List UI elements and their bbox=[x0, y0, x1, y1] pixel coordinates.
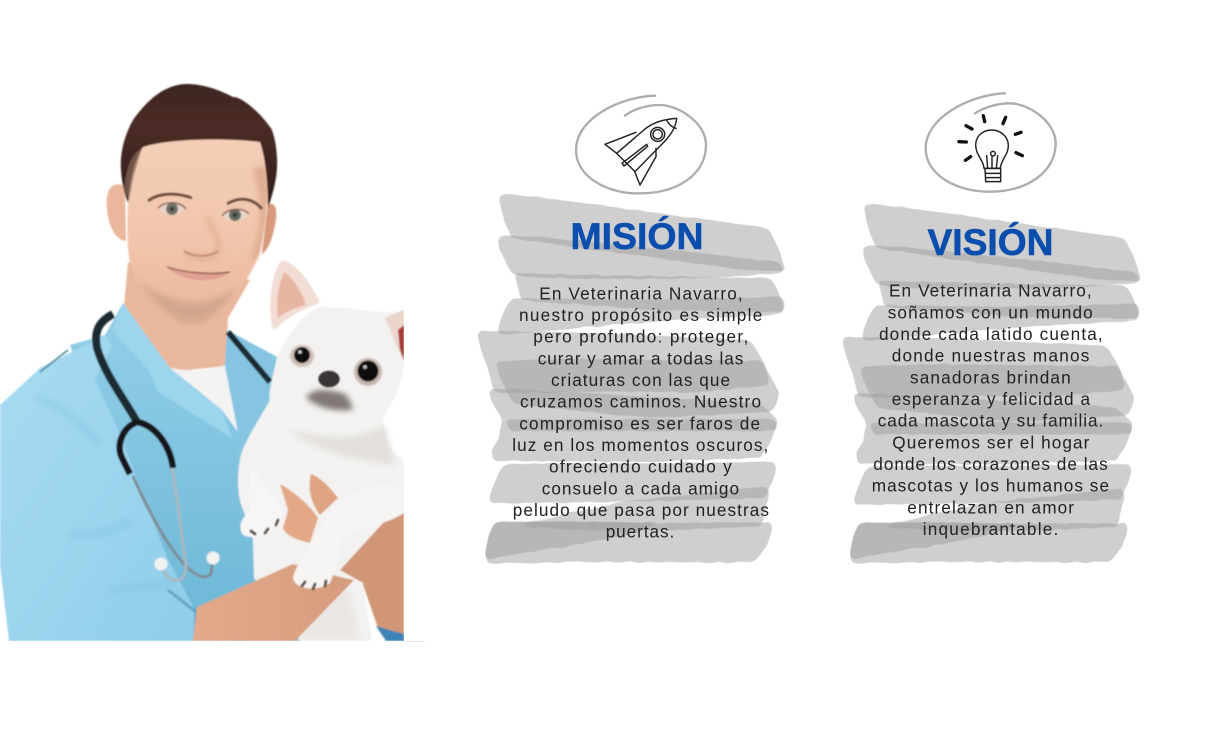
shirt torso bbox=[70, 303, 300, 641]
dog eyes bbox=[290, 345, 314, 367]
ears bbox=[107, 184, 126, 241]
text block: mision: pero profundo: proteger, bbox=[533, 327, 748, 347]
text block: mision: curar y amar a todas las bbox=[538, 348, 743, 368]
face bbox=[126, 138, 269, 280]
photo: veterinarian holding a white chihuahua bbox=[0, 84, 404, 641]
brush strokes: vision heading bbox=[863, 204, 1141, 289]
heading: vision: VISIÓN bbox=[928, 221, 1054, 263]
dog foreleg and paw left bbox=[239, 515, 253, 538]
text block: vision: En Veterinaria Navarro, bbox=[889, 281, 1092, 301]
sleeve bbox=[0, 335, 196, 641]
stethoscope neck tube bbox=[96, 314, 137, 422]
text block: vision: soñamos con un mundo bbox=[888, 302, 1093, 322]
neck bbox=[124, 262, 250, 372]
text block: mision bbox=[512, 283, 769, 542]
text block: vision: sanadoras brindan bbox=[910, 367, 1071, 387]
text block: vision: mascotas y los humanos se bbox=[872, 476, 1109, 496]
white undershirt bbox=[167, 365, 238, 432]
text block: vision: donde cada latido cuenta, bbox=[879, 324, 1103, 344]
dog left ear bbox=[270, 260, 320, 330]
dog foreleg and paw right bbox=[292, 502, 404, 590]
text block: mision: criaturas con las que bbox=[551, 370, 730, 390]
text block: mision: consuelo a cada amigo bbox=[542, 478, 739, 498]
text block: vision bbox=[872, 281, 1109, 539]
text block: mision: ofreciendo cuidado y bbox=[549, 457, 732, 477]
text block: mision: cruzamos caminos. Nuestro bbox=[520, 392, 761, 412]
eyebrows bbox=[148, 194, 192, 201]
icon: light bulb in hand-drawn circle bbox=[926, 93, 1056, 192]
dog right ear bbox=[385, 310, 404, 362]
text block: vision: inquebrantable. bbox=[923, 519, 1058, 539]
collar right bbox=[224, 330, 276, 404]
text block: vision: Queremos ser el hogar bbox=[892, 432, 1090, 452]
fingers bbox=[280, 484, 318, 543]
text block: vision: entrelazan en amor bbox=[907, 497, 1074, 517]
text block: mision: peludo que pasa por nuestras bbox=[513, 500, 769, 520]
collar left bbox=[112, 303, 232, 438]
text block: vision: esperanza y felicidad a bbox=[892, 389, 1090, 409]
hair bbox=[121, 84, 277, 208]
text block: mision: En Veterinaria Navarro, bbox=[539, 283, 743, 303]
text block: mision: luz en los momentos oscuros, bbox=[512, 435, 768, 455]
heading: mision: MISIÓN bbox=[570, 215, 704, 257]
mouth bbox=[167, 267, 230, 280]
stethoscope metal tubes bbox=[133, 476, 213, 577]
text block: mision: compromiso es ser faros de bbox=[519, 413, 760, 433]
nose bbox=[184, 218, 219, 257]
text block: mision: nuestro propósito es simple bbox=[519, 305, 762, 325]
far hand and wrist bbox=[335, 505, 404, 641]
dog body bbox=[238, 307, 404, 641]
forearm bbox=[193, 564, 354, 641]
text block: vision: donde nuestras manos bbox=[892, 346, 1089, 366]
text block: vision: cada mascota y su familia. bbox=[878, 411, 1103, 431]
eyes bbox=[160, 204, 184, 214]
dog muzzle bbox=[306, 390, 353, 410]
faint baseline under the photo bbox=[404, 641, 425, 642]
stethoscope black yoke bbox=[120, 422, 173, 474]
text block: vision: donde los corazones de las bbox=[873, 454, 1108, 474]
brush strokes: vision text bbox=[842, 281, 1140, 563]
text block: mision: puertas. bbox=[606, 522, 674, 542]
icon: rocket in hand-drawn circle bbox=[576, 96, 706, 193]
brush strokes: mision heading bbox=[498, 194, 785, 279]
brush strokes: mision text bbox=[477, 273, 785, 563]
